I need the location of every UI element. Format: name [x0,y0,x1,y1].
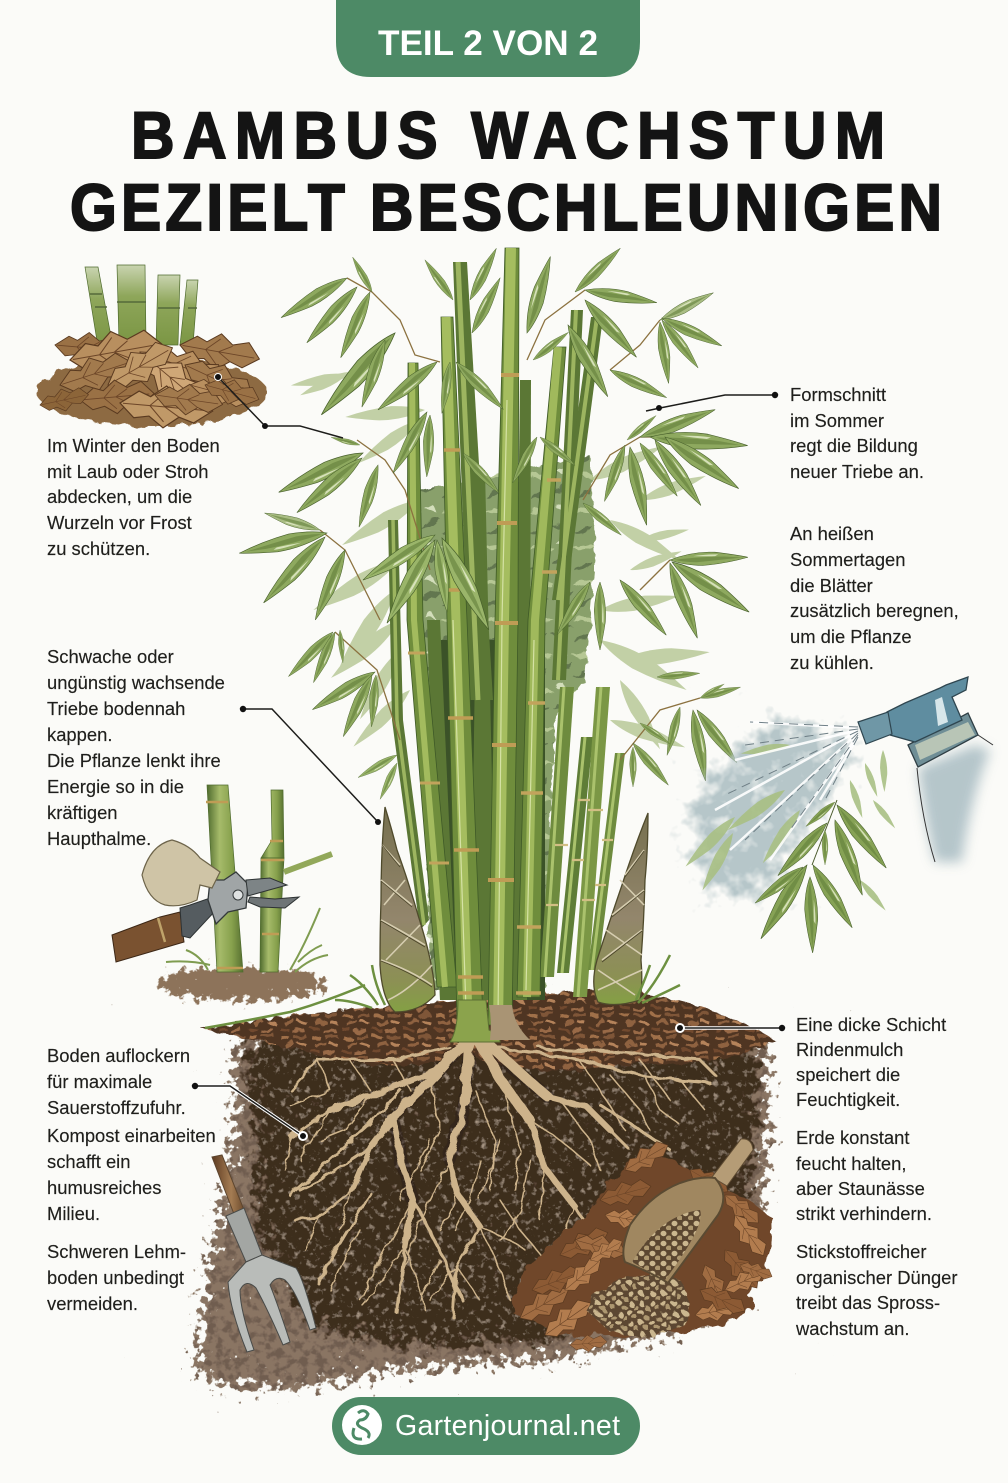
text: weak shoots: Schwache oder [47,646,174,667]
illustration: winter mulch pile [37,265,267,432]
mist [685,715,855,900]
leaves: right branch [553,403,753,788]
grass [166,908,328,972]
illustration: pruning shears on shoots [112,785,332,1002]
badge: Teil 2 von 2 [336,0,640,77]
badge: Teil 2 von 2: TEIL 2 VON 2 [378,24,598,63]
leaf pile [37,323,267,432]
outer soil with spattered edge [195,1015,770,1392]
text: soil preparation: Sauerstoffzufuhr. [47,1097,186,1118]
leaves: upper crown [278,244,724,421]
callout: weak shoots leader [240,706,381,825]
text: mulch, watering, fertilizer: Feuchtigkeit. [796,1089,900,1110]
text: winter protection: abdecken, um die [47,486,192,507]
icon: right bamboo shoot [594,813,648,1005]
icon: left bamboo shoot [380,807,435,1012]
text: soil preparation: Milieu. [47,1203,100,1224]
grass tufts [205,955,680,1028]
text: weak shoots: ungünstig wachsende [47,672,225,693]
callout: mulch leader [214,374,343,438]
text: winter protection: mit Laub oder Stroh [47,461,209,482]
title [70,100,942,245]
culm: short front left [441,317,484,1020]
stems [206,785,332,972]
text: weak shoots: Haupthalme. [47,828,151,849]
callout: loosen soil leader [192,1083,307,1140]
bamboo stubs [85,265,198,347]
text: mulch, watering, fertilizer: treibt das Spross- [796,1292,940,1313]
leaf spray [752,800,892,953]
pale background leaves [290,368,710,754]
handle [112,912,184,962]
culm highlights [393,262,597,925]
callout: pruning in summer leader [646,392,778,411]
text: mulch, watering, fertilizer: Erde konstant [796,1127,909,1148]
text: mulch, watering, fertilizer: organischer Dünger [796,1267,958,1288]
dark soil [240,1020,762,1350]
secateurs [180,872,299,938]
text: sprinkling leaves: um die Pflanze [790,626,912,647]
footer badge: Gartenjournal.net: Gartenjournal.net [395,1410,620,1442]
text: mulch, watering, fertilizer: feucht halten, [796,1153,906,1174]
text: winter protection: zu schützen. [47,538,150,559]
text: mulch, watering, fertilizer: wachstum an. [795,1318,909,1339]
pile of bark mulch [510,1136,775,1353]
ground [154,966,330,1002]
text: soil preparation: für maximale [47,1071,152,1092]
text: sprinkling leaves: An heißen [790,523,874,544]
text: mulch, watering, fertilizer: Eine dicke Schicht [796,1014,946,1035]
text: soil preparation: humusreiches [47,1177,161,1198]
back culms [388,262,603,1000]
title: GEZIELT BESCHLEUNIGEN [70,172,942,245]
illustration: bamboo plant [205,244,753,1042]
text: weak shoots: Die Pflanze lenkt ihre [47,750,221,771]
leaves: left branches and center [238,409,577,801]
text: winter protection: Wurzeln vor Frost [47,512,192,533]
text: sprinkling leaves: die Blätter [790,575,873,596]
icon: scoop [623,1139,753,1283]
icon: logo [342,1405,382,1445]
text: mulch, watering, fertilizer: strikt verhindern. [796,1203,932,1224]
text: sprinkling leaves: zu kühlen. [790,652,874,673]
culm: tallest main [488,248,519,1025]
text: mulch, watering, fertilizer: Rindenmulch [796,1039,903,1060]
mist leaves [681,741,898,913]
callout: bark mulch leader [676,1024,785,1032]
text: weak shoots: Triebe bodennah [47,698,185,719]
text: summer pruning: im Sommer [790,410,884,431]
branches [320,278,700,760]
text: summer pruning: regt die Bildung [790,435,918,456]
text: weak shoots: kappen. [47,724,112,745]
text: soil preparation: Boden auflockern [47,1045,190,1066]
text: weak shoots: kräftigen [47,802,118,823]
text: mulch, watering, fertilizer: Stickstoffreicher [796,1241,926,1262]
illustration: soil cross-section with roots [195,988,775,1392]
text: soil preparation: boden unbedingt [47,1267,184,1288]
mulch layer [200,988,775,1071]
right thin culms [540,687,625,997]
text: mulch, watering, fertilizer: speichert die [796,1064,900,1085]
text: summer pruning: neuer Triebe an. [790,461,924,482]
text: sprinkling leaves: zusätzlich beregnen, [790,600,959,621]
culm bases [450,1000,530,1042]
roots [285,1040,715,1317]
text: soil preparation: vermeiden. [47,1293,138,1314]
icon: glove [142,840,220,906]
text: weak shoots: Energie so in die [47,776,184,797]
culm: left front [407,363,457,987]
text: soil preparation: Schweren Lehm- [47,1241,186,1262]
text: soil preparation: schafft ein [47,1151,130,1172]
culm: right front [516,347,566,997]
illustration: spray bottle and leaves [681,677,993,953]
background foliage [412,455,596,990]
dark gaps between main culms [430,640,545,1000]
text: sprinkling leaves: Sommertagen [790,549,906,570]
spray rays [715,722,858,860]
bottle [858,677,993,862]
icon: garden fork [212,1155,316,1352]
text: mulch, watering, fertilizer: aber Staunässe [796,1178,925,1199]
title: BAMBUS WACHSTUM [131,100,885,173]
footer badge: Gartenjournal.net [332,1397,640,1455]
text: winter protection: Im Winter den Boden [47,435,220,456]
text: summer pruning: Formschnitt [790,384,886,405]
fertilizer pellets [586,1274,689,1336]
text: soil preparation: Kompost einarbeiten [47,1125,216,1146]
